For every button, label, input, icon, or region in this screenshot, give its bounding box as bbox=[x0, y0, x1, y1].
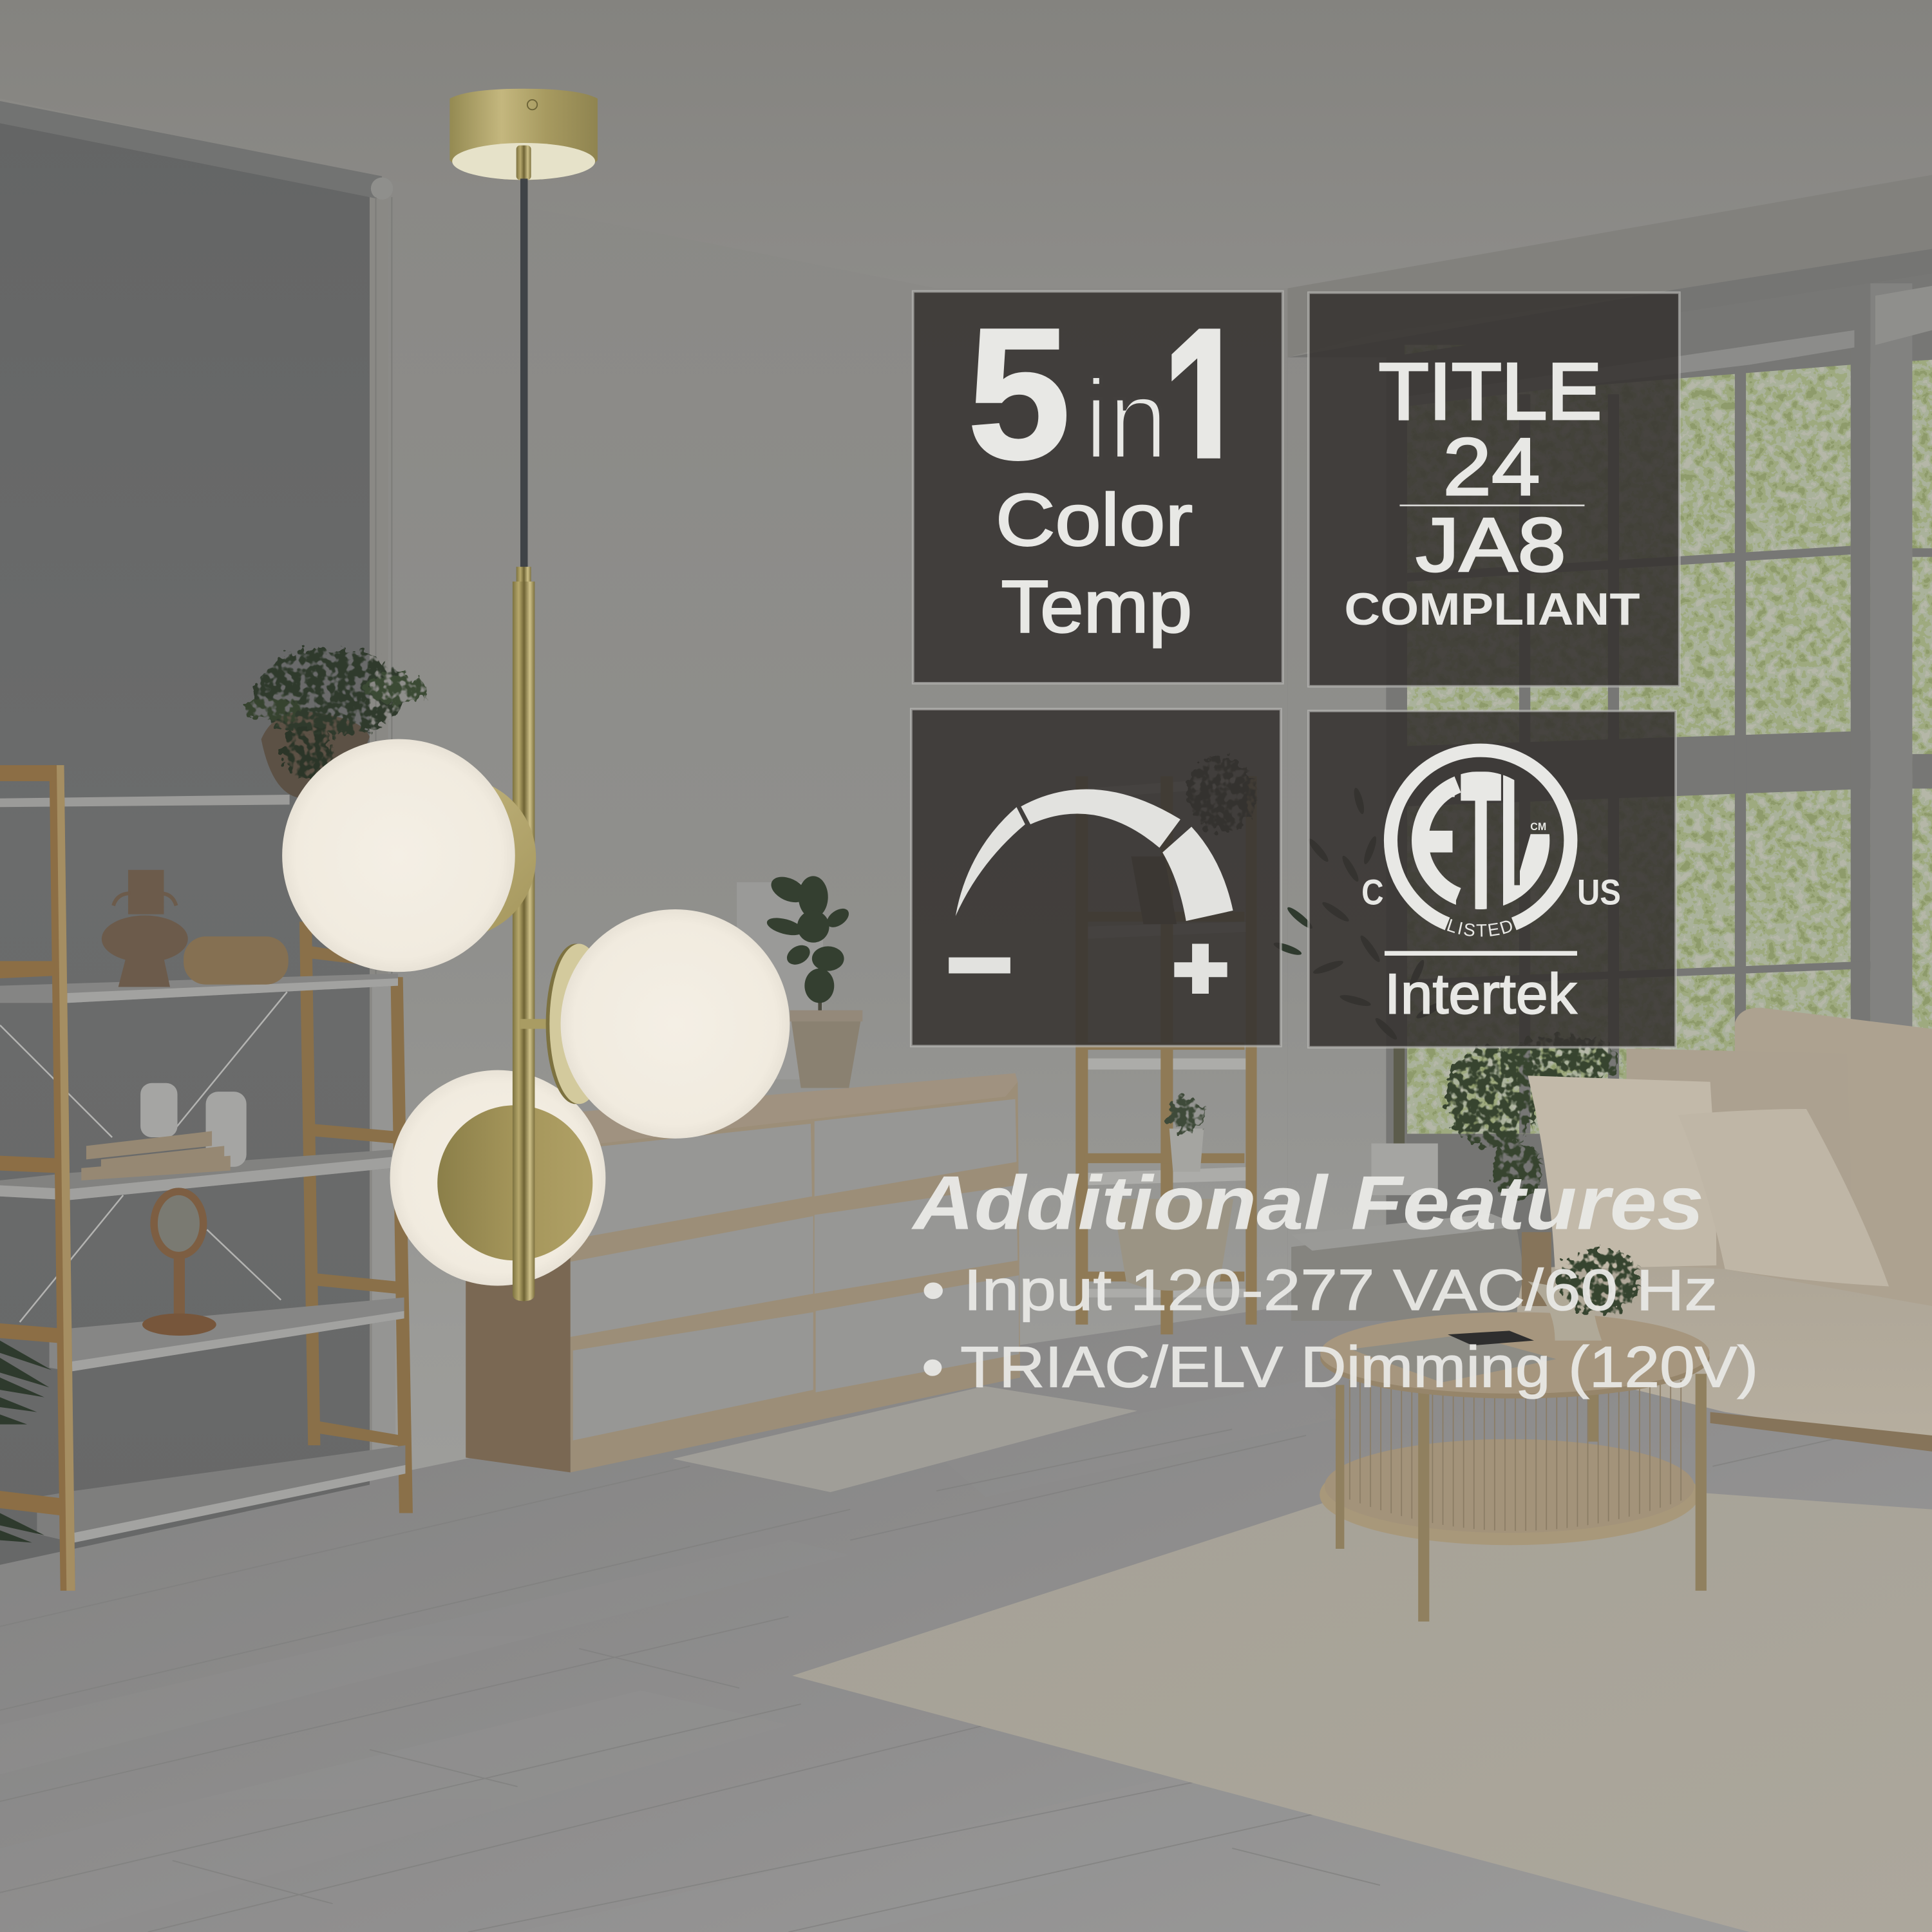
planter ledge bbox=[1291, 1220, 1526, 1321]
number 24: 24 bbox=[1443, 421, 1540, 512]
shelf plant behind panel bbox=[1188, 758, 1257, 831]
big numeral 1: 1 bbox=[1162, 281, 1248, 532]
hanging plant bbox=[244, 648, 429, 799]
panel: dimming bbox=[911, 709, 1281, 1046]
compliant text: COMPLIANT bbox=[1344, 584, 1640, 635]
mark letters: E bbox=[1412, 734, 1459, 951]
corner shelf bbox=[1075, 758, 1257, 1334]
intertek wordmark: Intertek bbox=[1385, 961, 1577, 1025]
roller blind bbox=[0, 101, 395, 1565]
drawers bbox=[571, 1099, 1019, 1441]
panel: 5 in 1 color temp bbox=[913, 281, 1283, 683]
ceramic vase bbox=[102, 870, 188, 987]
right globe bbox=[520, 909, 790, 1139]
icon: plus bbox=[1174, 944, 1227, 994]
icon: minus bbox=[949, 958, 1010, 973]
pendant light bbox=[282, 89, 790, 1301]
table planter bbox=[1528, 1249, 1641, 1341]
sheer curtain strip bbox=[372, 986, 395, 1456]
coffee table bbox=[1320, 1249, 1710, 1622]
cm mark: CM bbox=[1530, 820, 1546, 833]
shelves bbox=[0, 795, 405, 1542]
table top bbox=[1320, 1317, 1710, 1399]
bullet: dimming: • TRIAC/ELV Dimming (120V) bbox=[922, 1335, 1758, 1399]
stacked books bbox=[81, 1131, 231, 1180]
mark letters: T bbox=[1461, 733, 1501, 951]
magazine and phone bbox=[1350, 1334, 1556, 1383]
box on shelf bbox=[1131, 857, 1177, 924]
title text: TITLE bbox=[1379, 347, 1602, 437]
table rods bbox=[1349, 1380, 1682, 1531]
dresser front bbox=[571, 1082, 1020, 1472]
white cups bbox=[140, 1083, 247, 1167]
stem rod bbox=[513, 567, 535, 1301]
rule bbox=[1385, 951, 1577, 956]
panel: ETL listed bbox=[1307, 710, 1677, 1048]
left cushion bbox=[1528, 1075, 1716, 1269]
mark letters: L bbox=[1499, 734, 1540, 951]
us mark: US bbox=[1577, 872, 1621, 912]
dresser top bbox=[542, 1073, 1018, 1146]
upper globe bbox=[282, 739, 536, 972]
round mirror bbox=[142, 1191, 216, 1336]
right cushion bbox=[1678, 1109, 1889, 1286]
lower shelf bbox=[1320, 1444, 1699, 1545]
suspension cord bbox=[520, 178, 527, 571]
c mark: C bbox=[1361, 872, 1384, 912]
woven basket bbox=[1113, 1199, 1233, 1291]
large area rug bbox=[792, 1472, 1932, 1932]
sofa frame bbox=[1710, 1412, 1932, 1452]
window wall bbox=[1287, 249, 1932, 1306]
side wall beam bbox=[1287, 175, 1932, 357]
rear posts bbox=[299, 922, 413, 1513]
back wires bbox=[0, 992, 287, 1322]
blind roller bbox=[0, 101, 382, 200]
tall potted tree bbox=[1273, 787, 1444, 1195]
roller shades bbox=[1405, 330, 1854, 406]
lower globe bbox=[390, 1070, 605, 1285]
light word in: in bbox=[1084, 357, 1168, 483]
icon: dimmer arc high bbox=[1162, 827, 1233, 921]
plant foliage bbox=[244, 648, 429, 781]
sofa and plants bbox=[1273, 787, 1932, 1452]
fraction rule bbox=[1399, 504, 1584, 506]
floor planks bbox=[0, 1417, 1932, 1932]
potted fiddle plant bbox=[765, 872, 862, 1088]
icon: ETL certification mark bbox=[1383, 743, 1578, 936]
floor bbox=[0, 1232, 1932, 1932]
dresser bbox=[466, 872, 1137, 1492]
icon: dimmer arc low bbox=[956, 807, 1025, 916]
window glass with foliage bbox=[1386, 274, 1932, 1146]
icon: dimmer arc mid bbox=[1021, 789, 1180, 848]
picture frame behind plant bbox=[737, 882, 823, 1079]
sofa seat bbox=[1517, 1265, 1932, 1444]
ceiling canopy bbox=[450, 89, 598, 180]
back wall bbox=[388, 180, 1287, 1479]
mark ring bbox=[1391, 750, 1571, 924]
label temp: Temp bbox=[1001, 566, 1192, 649]
lighter floor boards bbox=[0, 1380, 1392, 1932]
small planter bbox=[1168, 1098, 1205, 1172]
window frame bars bbox=[1386, 274, 1932, 1146]
table legs bbox=[1336, 1374, 1707, 1622]
bullet: input voltage: • Input 120-277 VAC/60 Hz bbox=[922, 1258, 1718, 1323]
green bush bbox=[1446, 1035, 1622, 1200]
additional features block bbox=[911, 1160, 1758, 1399]
panel: title 24 JA8 compliant bbox=[1309, 292, 1680, 687]
left shelving unit bbox=[0, 765, 413, 1591]
tree leaves bbox=[1273, 787, 1444, 1042]
ceiling bbox=[0, 0, 1932, 289]
dresser side bbox=[466, 1109, 571, 1472]
front frame bbox=[0, 765, 75, 1591]
mark letters bbox=[1412, 772, 1549, 909]
heading: Additional Features bbox=[911, 1160, 1704, 1245]
JA8 text: JA8 bbox=[1416, 503, 1566, 588]
woven bowl bbox=[184, 936, 289, 985]
floor palm leaves bbox=[0, 1341, 52, 1542]
small bath mat bbox=[673, 1386, 1137, 1492]
listed lettering: LISTED bbox=[1446, 918, 1512, 936]
sofa back bbox=[1735, 1008, 1932, 1306]
label color: Color bbox=[996, 479, 1193, 562]
big numeral 5: 5 bbox=[967, 289, 1071, 498]
